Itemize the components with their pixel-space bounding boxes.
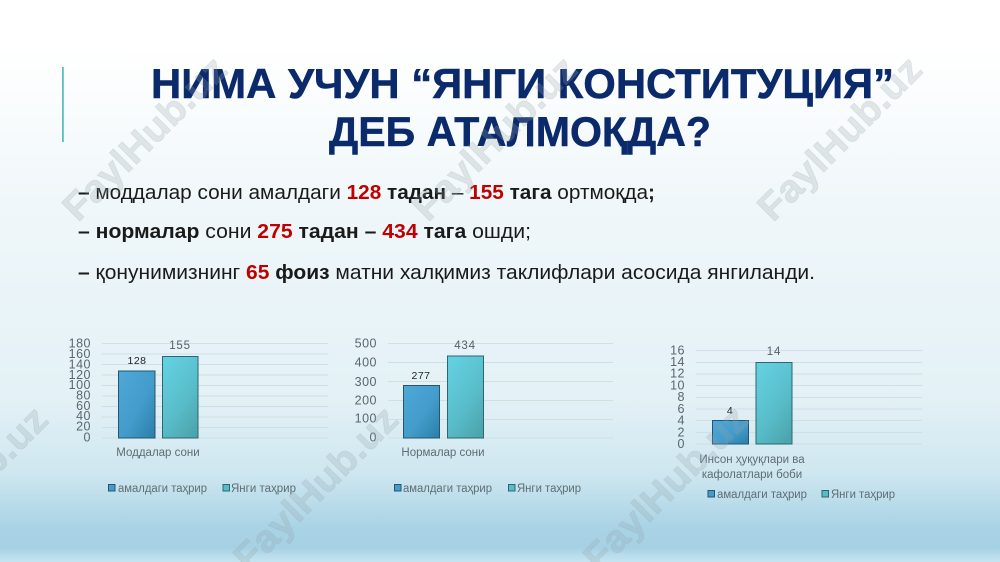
chart: rights chapter: 16 xyxy=(670,344,685,358)
chart: articles: 140 xyxy=(69,358,91,372)
value: 434: 434 xyxy=(454,340,476,352)
bullet: norms: – нормалар сони 275 тадан – 434 тага ошди; xyxy=(78,221,531,243)
bullet: percent: – қонунимизнинг 65 фоиз матни халқимиз таклифлари асосида янгиланди. xyxy=(78,262,815,284)
value: 155: 155 xyxy=(169,340,191,352)
chart: norms: 500 xyxy=(355,336,377,350)
chart: articles: 0 xyxy=(84,430,91,444)
bar: 155 xyxy=(162,356,198,438)
chart: rights chapter: 0 xyxy=(678,437,685,451)
watermarks: FaylHub.uz xyxy=(750,48,931,229)
legend: Янги таҳрир xyxy=(831,489,895,501)
legend xyxy=(708,489,895,501)
bar: 4 xyxy=(712,420,748,444)
chart: articles: 60 xyxy=(76,399,91,413)
chart: rights chapter: 8 xyxy=(678,390,685,404)
category label: Моддалар сони xyxy=(116,447,200,459)
bar: 14 xyxy=(756,362,792,444)
chart: rights chapter: 2 xyxy=(678,426,685,440)
value: 128: 128 xyxy=(127,355,147,367)
chart: rights chapter: 6 xyxy=(678,402,685,416)
chart: articles: 180 xyxy=(69,336,91,350)
chart: articles: 40 xyxy=(76,409,91,423)
chart: articles: 20 xyxy=(76,420,91,434)
category label: Инсон ҳуқуқлари ва xyxy=(699,454,805,466)
bar: 277 xyxy=(404,386,440,438)
chart: rights chapter: 4 xyxy=(678,414,685,428)
legend: амалдаги таҳрир xyxy=(717,489,807,501)
legend: амалдаги таҳрир xyxy=(118,483,207,495)
chart: norms: 100 xyxy=(355,412,377,426)
chart: norms: 0 xyxy=(370,430,377,444)
title: НИМА УЧУН “ЯНГИ КОНСТИТУЦИЯ” xyxy=(151,60,894,107)
value: 14: 14 xyxy=(767,346,781,358)
chart: rights chapter: 12 xyxy=(670,366,685,380)
chart: articles: 80 xyxy=(76,388,91,402)
accent line xyxy=(62,67,64,142)
legend xyxy=(394,483,581,495)
value: 277: 277 xyxy=(411,370,431,382)
chart: rights chapter: 10 xyxy=(670,378,685,392)
bullet: articles: – моддалар сони амалдаги 128 тадан – 155 тага ортмоқда; xyxy=(78,182,655,204)
value: 4: 4 xyxy=(727,405,733,417)
chart: norms: 300 xyxy=(355,375,377,389)
chart: rights chapter xyxy=(670,344,922,501)
title xyxy=(151,60,894,155)
chart: norms: 400 xyxy=(355,356,377,370)
category label: Нормалар сони xyxy=(401,447,485,459)
chart: norms: 200 xyxy=(355,394,377,408)
chart: rights chapter: 14 xyxy=(670,355,685,369)
chart: norms xyxy=(355,336,613,495)
legend: Янги таҳрир xyxy=(517,483,581,495)
title: ДЕБ АТАЛМОҚДА? xyxy=(329,108,711,155)
chart: articles xyxy=(69,336,328,495)
watermarks: FaylHub.uz xyxy=(55,48,236,229)
bar: 128 xyxy=(118,371,155,438)
legend xyxy=(108,483,296,495)
watermarks: FaylHub.uz xyxy=(405,48,586,229)
category label: кафолатлари боби xyxy=(702,469,802,481)
bar: 434 xyxy=(448,356,484,438)
bullet list xyxy=(78,182,815,284)
chart: articles: 160 xyxy=(69,347,91,361)
chart: articles: 100 xyxy=(69,378,91,392)
legend: Янги таҳрир xyxy=(231,483,296,495)
chart: articles: 120 xyxy=(69,368,91,382)
legend: амалдаги таҳрир xyxy=(403,483,492,495)
